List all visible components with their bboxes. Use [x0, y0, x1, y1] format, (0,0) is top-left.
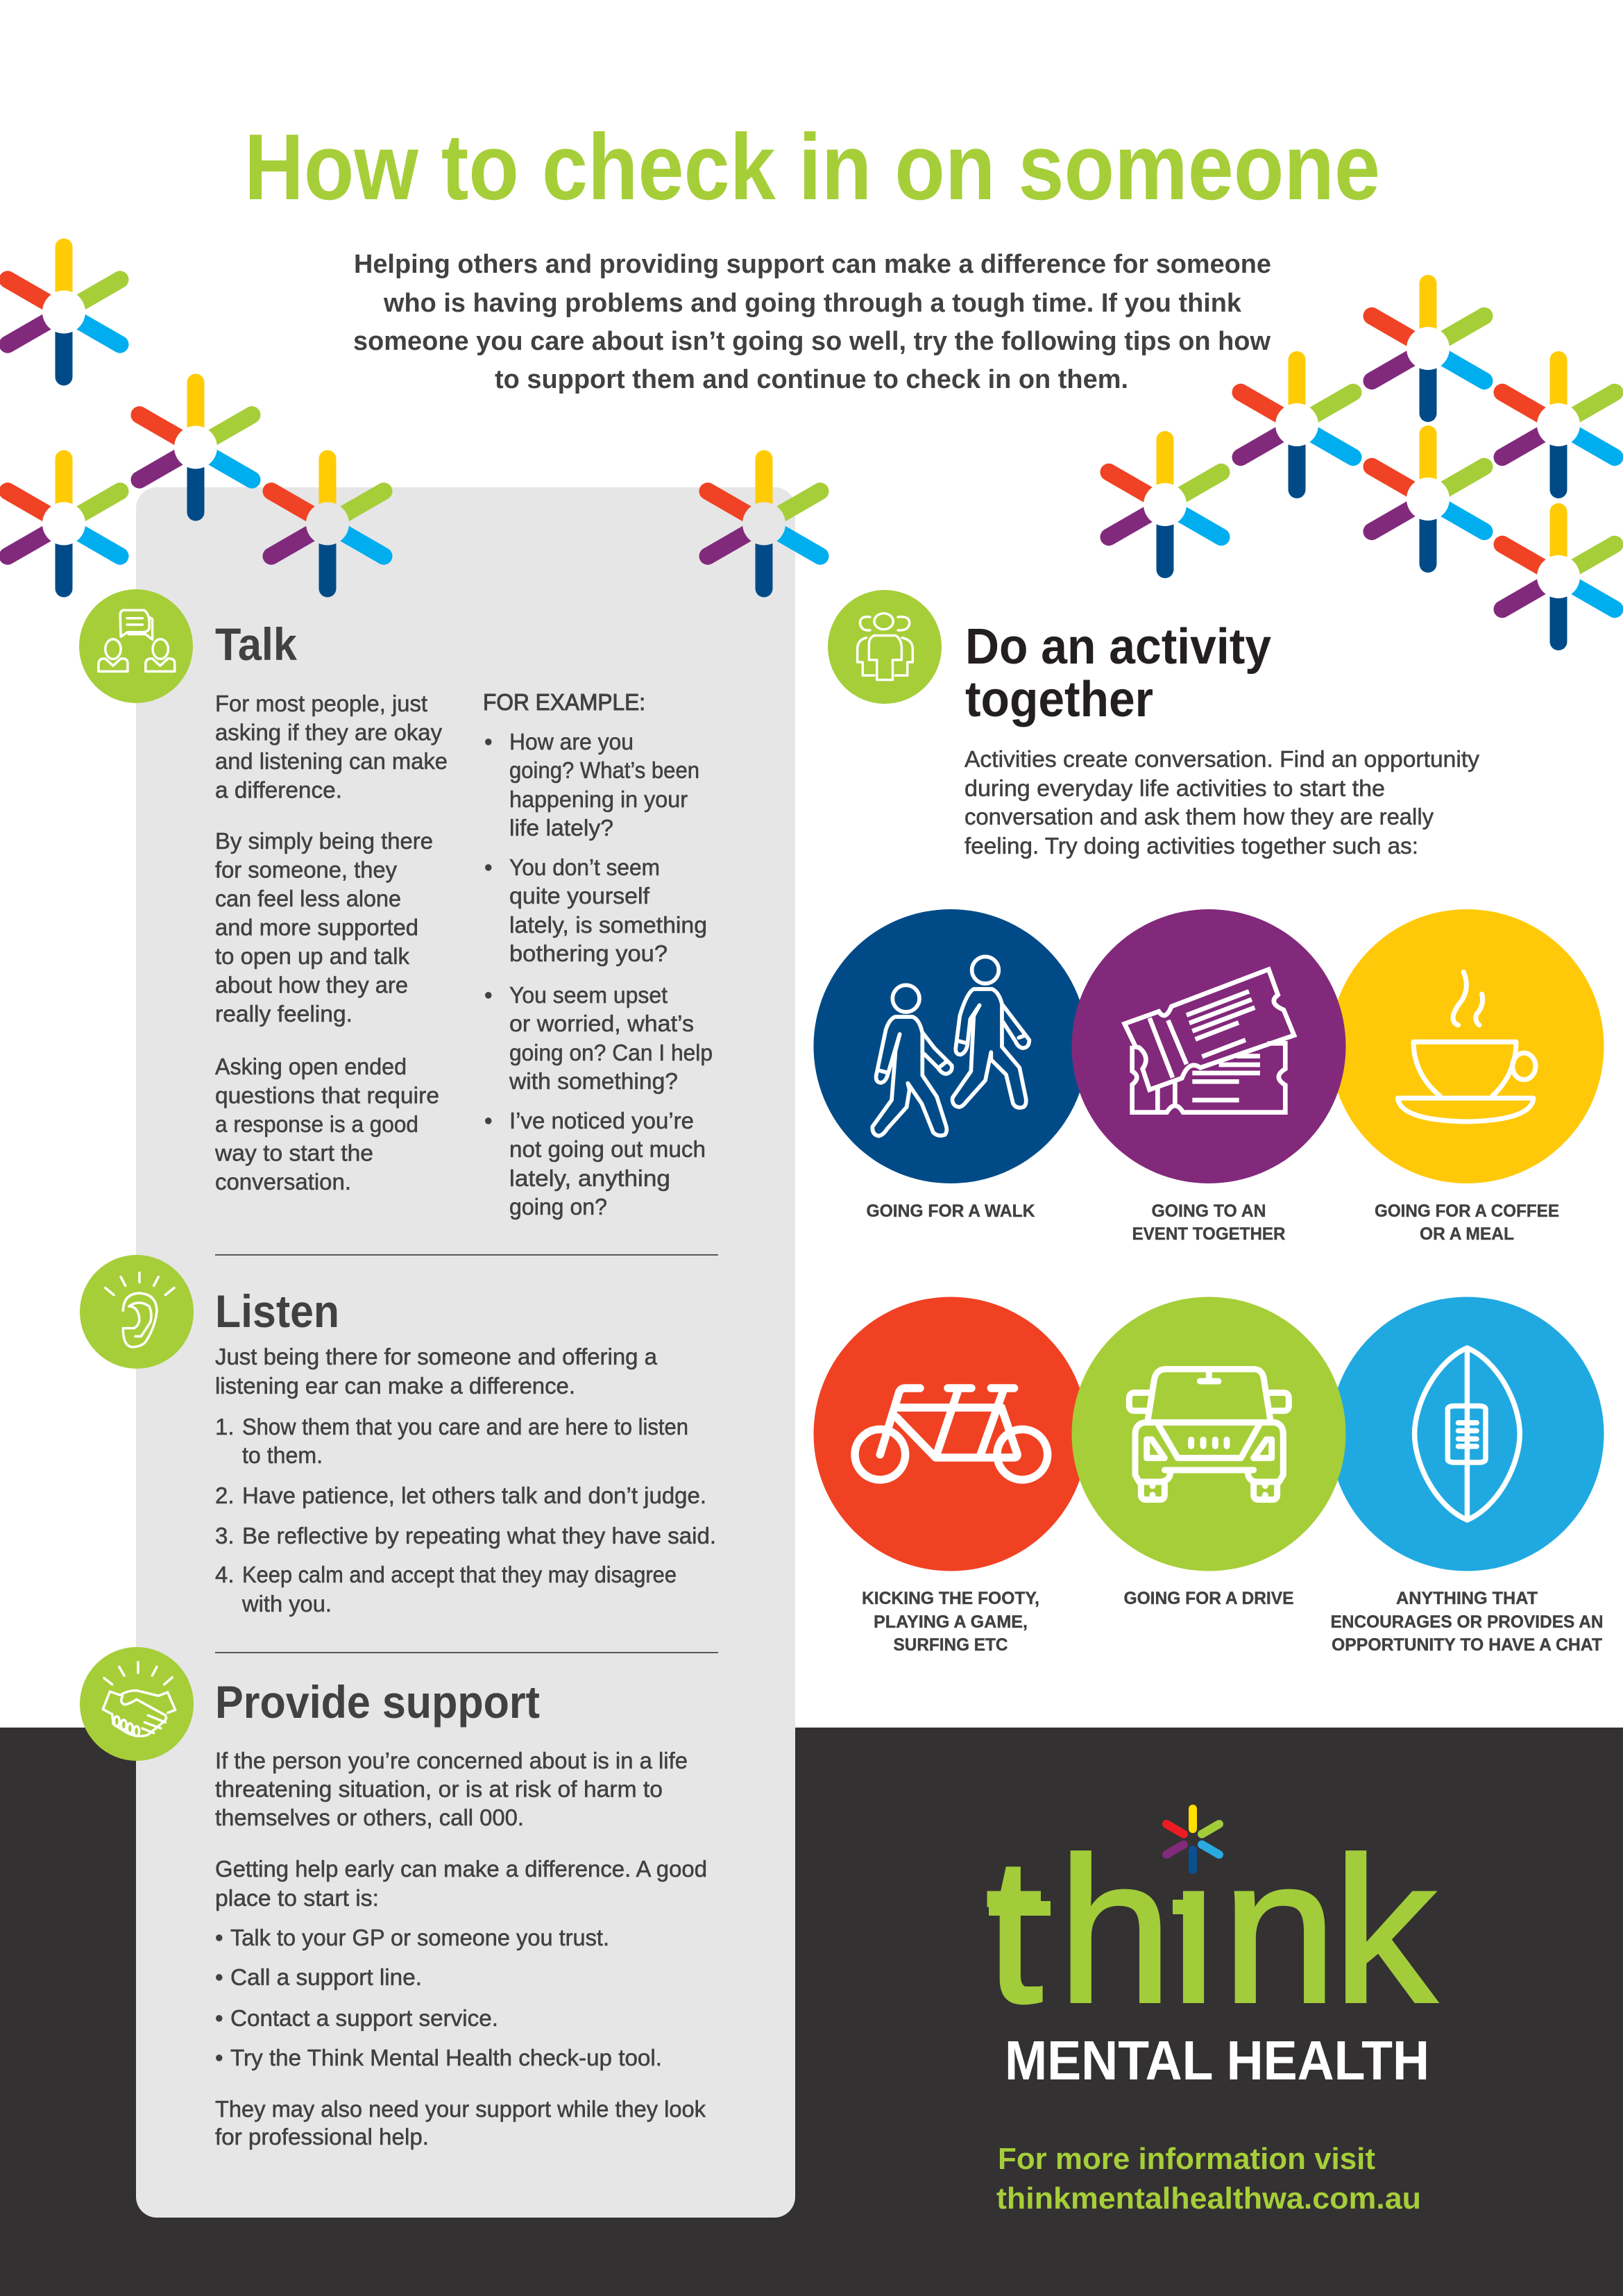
- text block: activity description: [965, 746, 1479, 859]
- text block: talk description: about how they are: [215, 972, 408, 998]
- heading: Do an activity together: Do an activity: [965, 619, 1271, 675]
- icon: handshake: [80, 1647, 194, 1761]
- text block: talk examples: going? What’s been: [509, 757, 699, 783]
- text block: activity description: conversation and ask them how they are really: [965, 804, 1434, 829]
- icon: activity group: [828, 590, 942, 704]
- text block: talk examples: not going out much: [509, 1136, 706, 1162]
- text block: talk examples: happening in your: [509, 786, 688, 812]
- list: listen steps: 2.: [215, 1483, 235, 1508]
- panel: grey tips background: [136, 487, 795, 2218]
- text block: talk description: way to start the: [214, 1140, 373, 1166]
- icon: tandem bicycle: [855, 1388, 1048, 1480]
- text block: provide support: •: [215, 2005, 223, 2031]
- text block: talk description: and listening can make: [215, 748, 448, 774]
- text block: talk examples: •: [484, 1108, 493, 1133]
- text block: provide support: Try the Think Mental Health check-up tool.: [230, 2045, 662, 2070]
- captions: first row: OR A MEAL: [1420, 1224, 1514, 1244]
- icon: car: [1129, 1369, 1289, 1500]
- call to action: thinkmentalhealthwa.com.au: [996, 2181, 1421, 2215]
- call to action: [996, 2142, 1421, 2215]
- captions: second row: OPPORTUNITY TO HAVE A CHAT: [1332, 1635, 1602, 1655]
- text block: talk description: a difference.: [215, 777, 342, 802]
- logo: mental health: MENTAL HEALTH: [1005, 2029, 1429, 2091]
- text block: provide support: [215, 1748, 707, 2150]
- text block: talk examples: FOR EXAMPLE:: [483, 689, 645, 715]
- text block: talk description: and more supported: [215, 915, 418, 940]
- text block: talk examples: going on?: [509, 1194, 607, 1219]
- text block: talk examples: [483, 689, 713, 1219]
- list: listen steps: 3.: [215, 1523, 235, 1548]
- text block: provide support: Contact a support service.: [230, 2005, 498, 2031]
- text block: talk examples: quite yourself: [509, 883, 650, 909]
- text block: talk examples: I’ve noticed you’re: [509, 1108, 694, 1133]
- text block: talk description: for someone, they: [215, 856, 397, 883]
- text block: talk examples: life lately?: [509, 815, 613, 841]
- icon: listen: [80, 1255, 194, 1369]
- activity: going for a walk: [813, 909, 1088, 1183]
- call to action: For more information visit: [998, 2142, 1375, 2176]
- footer band: [0, 1728, 1623, 2296]
- decorative stars: left cluster: [8, 247, 820, 589]
- heading: Do an activity together: [965, 619, 1271, 727]
- text block: talk examples: How are you: [509, 729, 634, 754]
- list: listen steps: Be reflective by repeating what they have said.: [242, 1523, 716, 1548]
- text block: talk description: conversation.: [215, 1169, 351, 1195]
- list: listen steps: Have patience, let others talk and don’t judge.: [242, 1483, 706, 1508]
- captions: second row: [862, 1589, 1603, 1655]
- text block: listen intro: [215, 1344, 658, 1399]
- text block: provide support: Talk to your GP or someone you trust.: [230, 1925, 609, 1950]
- captions: second row: ENCOURAGES OR PROVIDES AN: [1331, 1612, 1603, 1632]
- text block: talk examples: with something?: [509, 1068, 678, 1094]
- captions: first row: [866, 1201, 1559, 1244]
- captions: second row: PLAYING A GAME,: [874, 1612, 1028, 1632]
- text block: talk examples: You seem upset: [509, 982, 668, 1008]
- text block: provide support: themselves or others, call 000.: [215, 1805, 524, 1830]
- text block: talk description: Asking open ended: [215, 1054, 407, 1079]
- icon: talk: [79, 589, 193, 703]
- text block: provide support: •: [215, 1964, 223, 1990]
- intro text: to support them and continue to check in on them.: [495, 365, 1128, 394]
- text block: provide support: Call a support line.: [230, 1964, 422, 1990]
- text block: talk examples: lately, is something: [509, 912, 707, 938]
- list: listen steps: 1.: [215, 1414, 235, 1440]
- icon: football: [1415, 1348, 1520, 1520]
- text block: talk examples: bothering you?: [509, 940, 668, 966]
- text block: provide support: If the person you’re concerned about is in a life: [215, 1748, 688, 1773]
- text block: talk description: questions that require: [215, 1083, 439, 1108]
- title: How to check in on someone: [244, 115, 1380, 219]
- captions: second row: SURFING ETC: [894, 1635, 1008, 1655]
- text block: talk examples: lately, anything: [509, 1165, 670, 1191]
- heading: Talk: Talk: [215, 618, 297, 670]
- text block: talk description: For most people, just: [215, 691, 427, 716]
- activity row two: bike, car, football: [813, 1297, 1604, 1571]
- text block: activity description: Activities create conversation. Find an opportunity: [965, 746, 1479, 772]
- list: listen steps: 4.: [215, 1562, 235, 1587]
- text block: talk examples: •: [484, 854, 493, 880]
- captions: first row: GOING FOR A COFFEE: [1375, 1201, 1559, 1221]
- text block: talk description: asking if they are okay: [215, 719, 442, 745]
- icon: coffee cup: [1397, 972, 1536, 1122]
- activity: event tickets (yellow circle first, purple overlaps): [1071, 909, 1604, 1183]
- text block: provide support: •: [215, 2045, 223, 2070]
- icon: logo star: [1166, 1809, 1219, 1870]
- captions: first row: GOING TO AN: [1152, 1201, 1266, 1221]
- text block: talk examples: going on? Can I help: [509, 1040, 713, 1065]
- text block: talk description: can feel less alone: [215, 886, 401, 911]
- captions: second row: KICKING THE FOOTY,: [862, 1589, 1039, 1608]
- text block: provide support: for professional help.: [215, 2124, 429, 2150]
- text block: talk description: a response is a good: [215, 1111, 418, 1137]
- text block: listen intro: listening ear can make a difference.: [215, 1373, 575, 1399]
- intro text: [353, 250, 1271, 394]
- decorative stars: right cluster: [1109, 283, 1615, 641]
- text block: provide support: •: [215, 1925, 223, 1950]
- text block: listen intro: Just being there for someone and offering a: [215, 1344, 658, 1369]
- text block: talk description: to open up and talk: [215, 943, 409, 969]
- heading: Do an activity together: together: [965, 672, 1153, 727]
- captions: second row: ANYTHING THAT: [1396, 1589, 1538, 1608]
- text block: provide support: They may also need your support while they look: [215, 2096, 706, 2122]
- text block: provide support: threatening situation, or is at risk of harm to: [215, 1776, 663, 1802]
- intro text: Helping others and providing support can make a difference for someone: [354, 250, 1271, 279]
- text block: talk description: By simply being there: [215, 828, 433, 854]
- text block: talk examples: •: [484, 729, 493, 754]
- list: listen steps: Show them that you care and are here to listen: [242, 1414, 688, 1440]
- text block: talk examples: •: [484, 982, 493, 1008]
- text block: provide support: Getting help early can make a difference. A good: [215, 1856, 707, 1882]
- text block: activity description: during everyday life activities to start the: [965, 775, 1385, 801]
- list: listen steps: with you.: [241, 1591, 332, 1617]
- captions: second row: GOING FOR A DRIVE: [1124, 1589, 1293, 1608]
- captions: first row: GOING FOR A WALK: [866, 1201, 1035, 1221]
- heading: Listen: Listen: [215, 1285, 339, 1337]
- text block: talk examples: You don’t seem: [509, 854, 660, 880]
- list: listen steps: to them.: [242, 1442, 323, 1468]
- text block: provide support: place to start is:: [215, 1885, 379, 1911]
- text block: talk description: really feeling.: [215, 1001, 352, 1027]
- captions: first row: EVENT TOGETHER: [1132, 1224, 1285, 1244]
- text block: talk description: [214, 691, 448, 1195]
- logo: think: think: [985, 1815, 1440, 2046]
- text block: activity description: feeling. Try doing activities together such as:: [965, 833, 1418, 859]
- text block: talk examples: or worried, what’s: [509, 1011, 694, 1036]
- list: listen steps: Keep calm and accept that they may disagree: [242, 1562, 677, 1587]
- list: listen steps: [215, 1414, 716, 1617]
- intro text: who is having problems and going through a tough time. If you think: [383, 289, 1242, 318]
- heading: Provide support: Provide support: [215, 1676, 540, 1728]
- intro text: someone you care about isn’t going so well, try the following tips on how: [353, 327, 1271, 356]
